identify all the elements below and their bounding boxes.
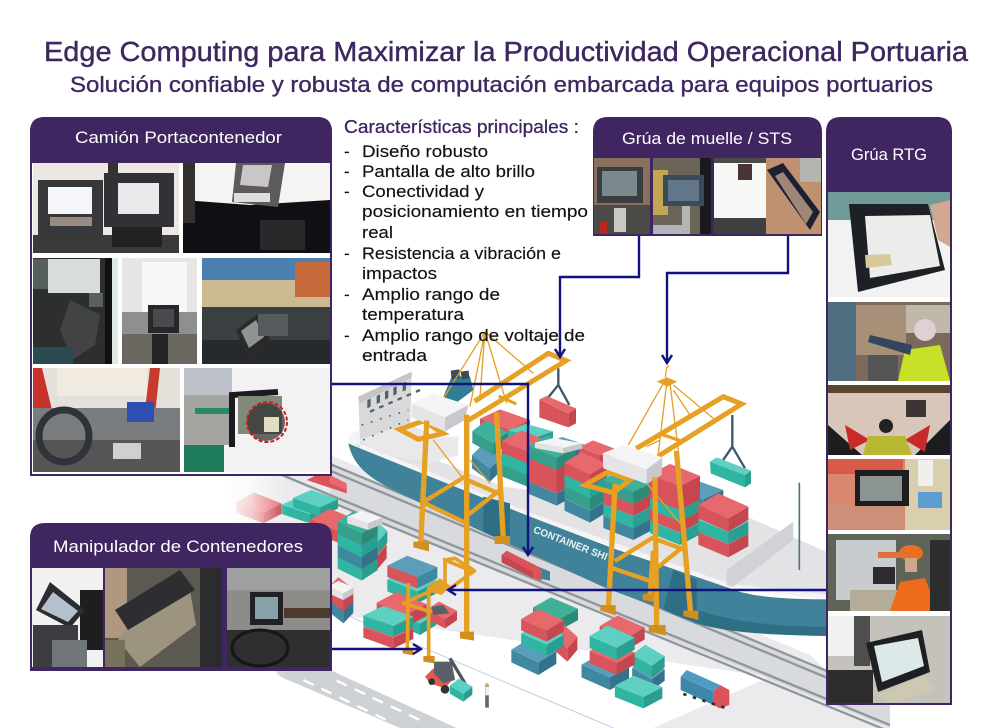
subtitle: Solución confiable y robusta de computación embarcada para equipos portuarios bbox=[70, 72, 933, 97]
features list: - bbox=[344, 142, 350, 161]
heading: Grúa RTG bbox=[851, 145, 927, 164]
heading: Camión Portacontenedor bbox=[75, 128, 282, 147]
boom bbox=[470, 353, 566, 419]
title: Edge Computing para Maximizar la Productividad Operacional Portuaria bbox=[44, 36, 968, 67]
features list: - bbox=[344, 285, 350, 304]
front legs bbox=[421, 417, 467, 635]
photo: STS 3 bbox=[714, 158, 821, 234]
rear loop bbox=[399, 421, 443, 439]
arrow: STS right to right crane bbox=[662, 236, 788, 363]
features list: Diseño robusto bbox=[362, 142, 488, 161]
arrow: truck panel to truck bbox=[332, 384, 533, 555]
feet bbox=[413, 542, 474, 641]
features list: impactos bbox=[362, 264, 437, 283]
crane: right bbox=[585, 366, 751, 636]
apex bbox=[657, 377, 677, 387]
panel: Manipulador de Contenedores bbox=[30, 523, 332, 671]
teal load bbox=[710, 457, 751, 487]
hook bbox=[547, 368, 569, 405]
yard stacks bbox=[363, 556, 665, 708]
features list: Conectividad y bbox=[362, 182, 485, 201]
white rim bbox=[348, 430, 830, 600]
road bbox=[267, 660, 457, 728]
brace fine bbox=[433, 440, 490, 483]
superstructure bbox=[358, 369, 473, 463]
features list: posicionamiento en tiempo bbox=[362, 202, 588, 221]
photo: STS 2 bbox=[653, 158, 711, 234]
photo: RTG monitor bbox=[828, 192, 950, 297]
stays bbox=[443, 332, 533, 407]
photo: joystick terminal bbox=[32, 568, 103, 667]
photo: red cab bbox=[33, 368, 180, 472]
back foot bbox=[495, 536, 510, 544]
photo: cab 1 bbox=[33, 258, 118, 364]
panel: Camión Portacontenedor bbox=[30, 117, 332, 475]
features list: - bbox=[344, 244, 350, 263]
features list: - bbox=[344, 182, 350, 201]
boom bbox=[638, 397, 742, 455]
features list: Pantalla de alto brillo bbox=[362, 162, 535, 181]
arrow: STS left to left crane bbox=[555, 236, 639, 357]
photo: truck dash bbox=[183, 163, 330, 253]
illustration: container port bbox=[223, 332, 890, 728]
features list: real bbox=[362, 223, 393, 242]
photo strip background bbox=[828, 192, 950, 703]
ship name: CONTAINER SHI bbox=[532, 525, 609, 563]
funnel bbox=[443, 377, 473, 405]
photo: cab 2 bbox=[122, 258, 197, 364]
yard crane bbox=[403, 558, 473, 663]
heading: Grúa de muelle / STS bbox=[622, 129, 792, 148]
arrows bbox=[332, 236, 827, 654]
containers on ship bbox=[472, 409, 748, 557]
photo: mounting bracket bbox=[105, 568, 222, 667]
deck bbox=[348, 430, 830, 598]
hook bbox=[723, 415, 745, 468]
photo: truck door bbox=[184, 368, 330, 472]
hull bbox=[348, 443, 830, 636]
features list bbox=[344, 117, 588, 365]
back leg bbox=[497, 415, 503, 540]
features heading: Características principales : bbox=[344, 117, 579, 137]
yard edge bbox=[350, 617, 613, 728]
features list: - bbox=[344, 326, 350, 345]
photo: operator in hi-vis bbox=[828, 302, 950, 381]
photo: port road bbox=[202, 258, 330, 364]
left quay container stacks bbox=[236, 490, 387, 623]
features list: Amplio rango de voltaje de bbox=[362, 326, 585, 345]
left fade bbox=[223, 373, 287, 728]
heading: Manipulador de Contenedores bbox=[53, 537, 303, 556]
bow wall bbox=[727, 522, 793, 587]
forklift bbox=[425, 658, 472, 702]
features list: temperatura bbox=[362, 305, 465, 324]
mast bbox=[797, 483, 802, 570]
photo: handler cabin bbox=[227, 568, 330, 667]
features list: entrada bbox=[362, 346, 428, 365]
features list: Resistencia a vibración e bbox=[362, 244, 561, 263]
photo: wall monitor bbox=[828, 616, 950, 703]
legs bbox=[608, 480, 657, 628]
arrow: RTG panel to yard crane bbox=[448, 585, 827, 595]
photo: cabin monitor bbox=[828, 459, 950, 530]
panel: Grúa de muelle / STS bbox=[593, 117, 822, 236]
red load bbox=[539, 396, 576, 427]
back leg bbox=[677, 453, 691, 613]
blue truck bbox=[681, 670, 729, 708]
cab bbox=[603, 445, 662, 484]
panel: Grúa RTG bbox=[826, 117, 952, 705]
road markings bbox=[303, 680, 427, 723]
photo: STS 1 bbox=[594, 158, 650, 234]
photo: cabin rear view bbox=[828, 385, 950, 455]
photo: two terminals bbox=[33, 163, 179, 253]
rail wagon bbox=[307, 472, 347, 493]
features list: - bbox=[344, 162, 350, 181]
worker bbox=[485, 683, 489, 708]
hull shading bbox=[483, 497, 830, 636]
ship bbox=[348, 369, 830, 636]
photo: operator in orange bbox=[828, 534, 950, 611]
red truck bbox=[502, 551, 550, 581]
loop bbox=[585, 472, 630, 493]
crane: left bbox=[399, 332, 576, 641]
features list: Amplio rango de bbox=[362, 285, 500, 304]
rails bbox=[270, 440, 890, 728]
braces bbox=[425, 477, 500, 523]
arrow: handler panel to yard crane bbox=[332, 644, 421, 654]
quay ground bbox=[230, 390, 890, 728]
cab bbox=[412, 393, 468, 431]
